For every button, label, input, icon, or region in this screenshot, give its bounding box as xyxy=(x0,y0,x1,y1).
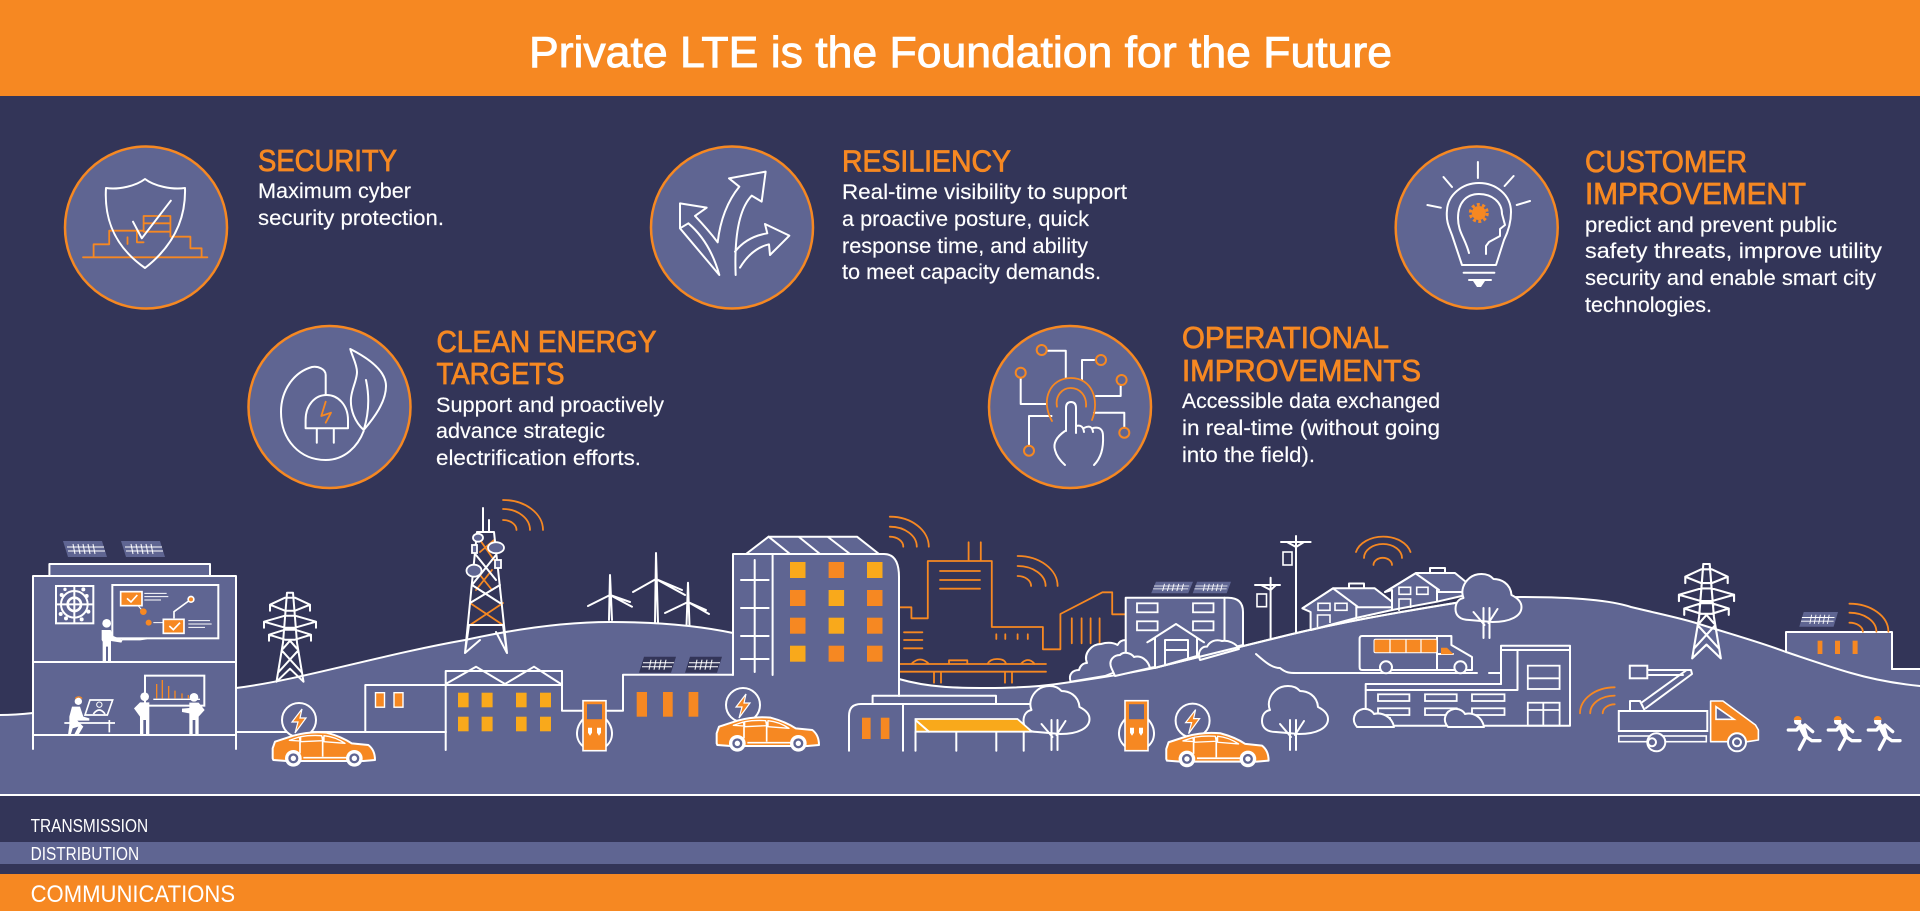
icon: ev charger 1 xyxy=(577,701,612,751)
icon: ev charger 2 xyxy=(1119,701,1154,751)
illustration: low buildings left xyxy=(236,657,733,750)
person standing left xyxy=(134,692,149,735)
illustration: hill lines xyxy=(0,597,1920,715)
bushes at school xyxy=(1354,709,1394,727)
text: customer description: security and enable smart city xyxy=(1585,267,1877,290)
illustration: tree 2 xyxy=(1262,686,1328,750)
ground line xyxy=(0,794,1920,796)
icon: wifi arcs building xyxy=(890,517,929,547)
illustration: right building xyxy=(1786,604,1892,669)
legend: transmission: TRANSMISSION xyxy=(31,816,148,836)
legend: distribution: DISTRIBUTION xyxy=(31,844,139,864)
illustration: tree 3 xyxy=(1456,574,1522,638)
icon: wifi arcs right xyxy=(1849,604,1888,632)
heading: clean energy targets: CLEAN ENERGY xyxy=(436,324,656,359)
heading: operational improvements: IMPROVEMENTS xyxy=(1182,353,1421,388)
icon: three workers running xyxy=(1788,716,1900,749)
panel: resiliency xyxy=(651,144,1127,308)
illustration: canopy building xyxy=(849,696,1040,751)
panel: security xyxy=(65,143,444,308)
heading: clean energy targets: TARGETS xyxy=(436,356,564,391)
text: operational description: Accessible data exchanged xyxy=(1182,390,1440,413)
text: clean energy description: electrification efforts. xyxy=(436,447,641,470)
illustration: school building xyxy=(1354,646,1570,727)
illustration: gas station canopy xyxy=(916,719,1032,751)
illustration: transmission pylon left xyxy=(264,593,316,682)
heading: customer improvement: CUSTOMER xyxy=(1585,144,1747,179)
solar panels on control building xyxy=(63,541,165,557)
illustration: houses xyxy=(1280,537,1466,637)
text: resiliency description: a proactive posture, quick xyxy=(842,208,1090,231)
icon: bucket truck xyxy=(1619,666,1758,751)
icon: shield and city xyxy=(65,146,227,308)
icon: electric car 2 xyxy=(717,688,819,752)
illustration: orange city skyline xyxy=(890,517,1126,683)
text: operational description xyxy=(1182,390,1440,467)
text: security description: Maximum cyber xyxy=(258,180,411,203)
text: resiliency description: to meet capacity demands. xyxy=(842,261,1101,284)
panel: customer improvement xyxy=(1396,144,1883,317)
icon: bus xyxy=(1360,636,1472,673)
heading: security: SECURITY xyxy=(258,143,397,178)
bushes xyxy=(1070,640,1126,682)
icon: electric car 1 xyxy=(273,703,375,767)
illustration: poles xyxy=(1255,536,1311,638)
text: resiliency description: response time, and ability xyxy=(842,235,1089,258)
heading: operational improvements xyxy=(1182,320,1421,388)
title banner: Private LTE is the Foundation for the Future xyxy=(529,28,1392,77)
icon: wifi arcs tower xyxy=(503,500,543,530)
icon: electric car 3 xyxy=(1166,704,1269,767)
text: customer description: safety threats, improve utility xyxy=(1585,240,1883,263)
heading: clean energy targets xyxy=(436,324,656,391)
icon: diverging arrows xyxy=(651,146,813,308)
heading: operational improvements: OPERATIONAL xyxy=(1182,320,1389,355)
text: customer description: predict and prevent public xyxy=(1585,214,1837,237)
text: security description xyxy=(258,180,444,230)
text: clean energy description: advance strategic xyxy=(436,420,605,443)
person at desk xyxy=(68,698,89,735)
icon: wifi arcs houses xyxy=(1356,537,1410,565)
text: customer description xyxy=(1585,214,1883,317)
illustration: hills ground xyxy=(0,554,1920,795)
title banner xyxy=(0,0,1920,96)
icon: wifi arcs city xyxy=(1018,556,1058,586)
illustration: apartment building and bushes xyxy=(1070,582,1280,682)
panel: clean energy targets xyxy=(248,324,665,488)
icon: lightbulb with head xyxy=(1396,146,1558,308)
illustration: wind turbines xyxy=(588,553,709,626)
heading: customer improvement xyxy=(1585,144,1806,211)
text: resiliency description: Real-time visibility to support xyxy=(842,181,1127,204)
control room interior xyxy=(56,585,218,735)
text: security description: security protection. xyxy=(258,207,444,230)
legend: communications xyxy=(0,874,1920,911)
text: clean energy description: Support and proactively xyxy=(436,394,665,417)
legend: distribution xyxy=(0,842,1920,864)
illustration: office tower xyxy=(733,537,899,696)
text: customer description: technologies. xyxy=(1585,294,1712,317)
icon: touch circuit xyxy=(989,326,1151,488)
illustration: communications tower xyxy=(465,500,543,653)
illustration: transmission pylon right xyxy=(1679,564,1734,658)
heading: resiliency: RESILIENCY xyxy=(842,144,1011,178)
text: resiliency description xyxy=(842,181,1127,284)
text: operational description: into the field). xyxy=(1182,444,1315,467)
heading: customer improvement: IMPROVEMENT xyxy=(1585,176,1806,211)
illustration: tree 1 xyxy=(1024,686,1090,750)
person standing right xyxy=(182,693,205,735)
illustration: control building xyxy=(33,541,236,749)
icon: wifi arcs truck xyxy=(1580,687,1615,713)
panel: operational improvements xyxy=(989,320,1440,488)
text: clean energy description xyxy=(436,394,665,470)
person presenting xyxy=(102,619,123,662)
text: operational description: in real-time (without going xyxy=(1182,417,1440,440)
legend: communications: COMMUNICATIONS xyxy=(31,881,235,908)
icon: plug and leaf xyxy=(248,326,410,488)
